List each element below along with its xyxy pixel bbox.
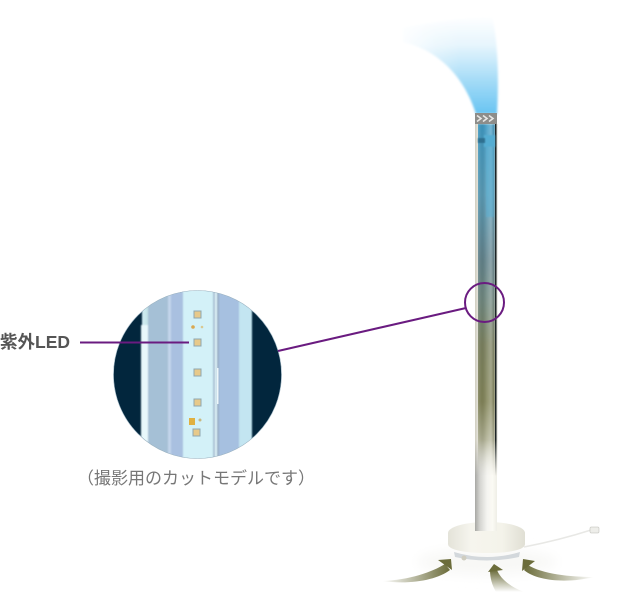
power cord with plug bbox=[524, 527, 599, 547]
tower head with chevrons bbox=[475, 113, 497, 124]
leader line to LED bbox=[80, 342, 189, 344]
lens outline bbox=[114, 290, 282, 458]
magnified LED lens bbox=[113, 288, 282, 461]
arrow: left bbox=[382, 559, 452, 582]
air plume rising from the top bbox=[403, 16, 498, 114]
tower highlight circle bbox=[465, 283, 504, 322]
arrow: right bbox=[522, 559, 594, 581]
floor shadow under the base bbox=[417, 549, 557, 575]
base bbox=[448, 522, 525, 560]
caption: （撮影用のカットモデルです） bbox=[77, 468, 315, 488]
leader line from lens to tower bbox=[278, 308, 466, 351]
arrow: centre bbox=[488, 564, 524, 592]
label: 紫外LED: 紫外LED bbox=[0, 332, 70, 352]
LED chips bbox=[193, 311, 201, 436]
inflow arrows bbox=[382, 559, 594, 592]
tower body bbox=[475, 124, 498, 531]
